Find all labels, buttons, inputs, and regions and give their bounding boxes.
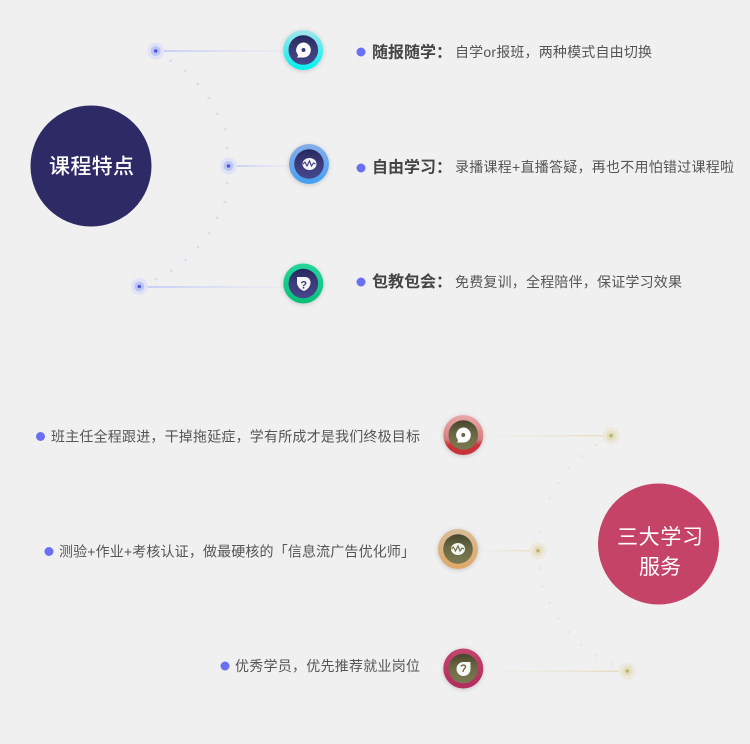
icon: sound wave, blue ring	[289, 144, 329, 184]
panel: three services	[36, 415, 719, 688]
icon: speech bubble, red ring	[443, 415, 483, 455]
connector: item 3	[131, 278, 289, 295]
text: service 1: 班主任全程跟进，干掉拖延症，学有所成才是我们终极目标	[51, 428, 420, 444]
text: service 3: 优秀学员，优先推荐就业岗位	[235, 658, 420, 674]
text: item 2	[356, 158, 734, 176]
text: item 1: 随报随学：	[372, 42, 452, 62]
text: item 3: 免费复训，全程陪伴，保证学习效果	[455, 274, 682, 290]
connector: service 3	[483, 662, 636, 680]
text: item 1	[356, 42, 652, 62]
dotted arc: three services	[538, 444, 613, 665]
text: service 2: 测验+作业+考核认证，做最硬核的「信息流广告优化师」	[59, 544, 415, 560]
icon: speech bubble, cyan ring	[283, 30, 323, 70]
heading circle: course features: 课程特点	[49, 156, 134, 178]
heading circle: course features	[30, 106, 152, 226]
text: item 2: 录播课程+直播答疑，再也不用怕错过课程啦	[455, 159, 734, 175]
text: item 1: 自学or报班，两种模式自由切换	[455, 44, 652, 60]
dotted arc: course features	[154, 59, 229, 281]
panel: course features	[30, 30, 734, 304]
text: item 3: 包教包会：	[372, 272, 452, 291]
connector: item 2	[220, 158, 291, 174]
icon: question shield, green ring: ?	[300, 280, 307, 292]
connector: item 1	[147, 42, 286, 60]
heading circle: three services: 服务	[639, 556, 681, 579]
icon: sound wave, tan ring	[438, 529, 478, 569]
heading circle: three services	[598, 484, 719, 604]
connector: service 2	[478, 542, 546, 559]
heading circle: three services: 三大学习	[617, 526, 703, 549]
connector: service 1	[483, 427, 620, 444]
text: item 3	[356, 272, 682, 291]
text: item 2: 自由学习：	[372, 158, 452, 176]
icon: question shield, green ring	[283, 264, 323, 304]
icon: leaf question, crimson ring	[443, 648, 483, 688]
